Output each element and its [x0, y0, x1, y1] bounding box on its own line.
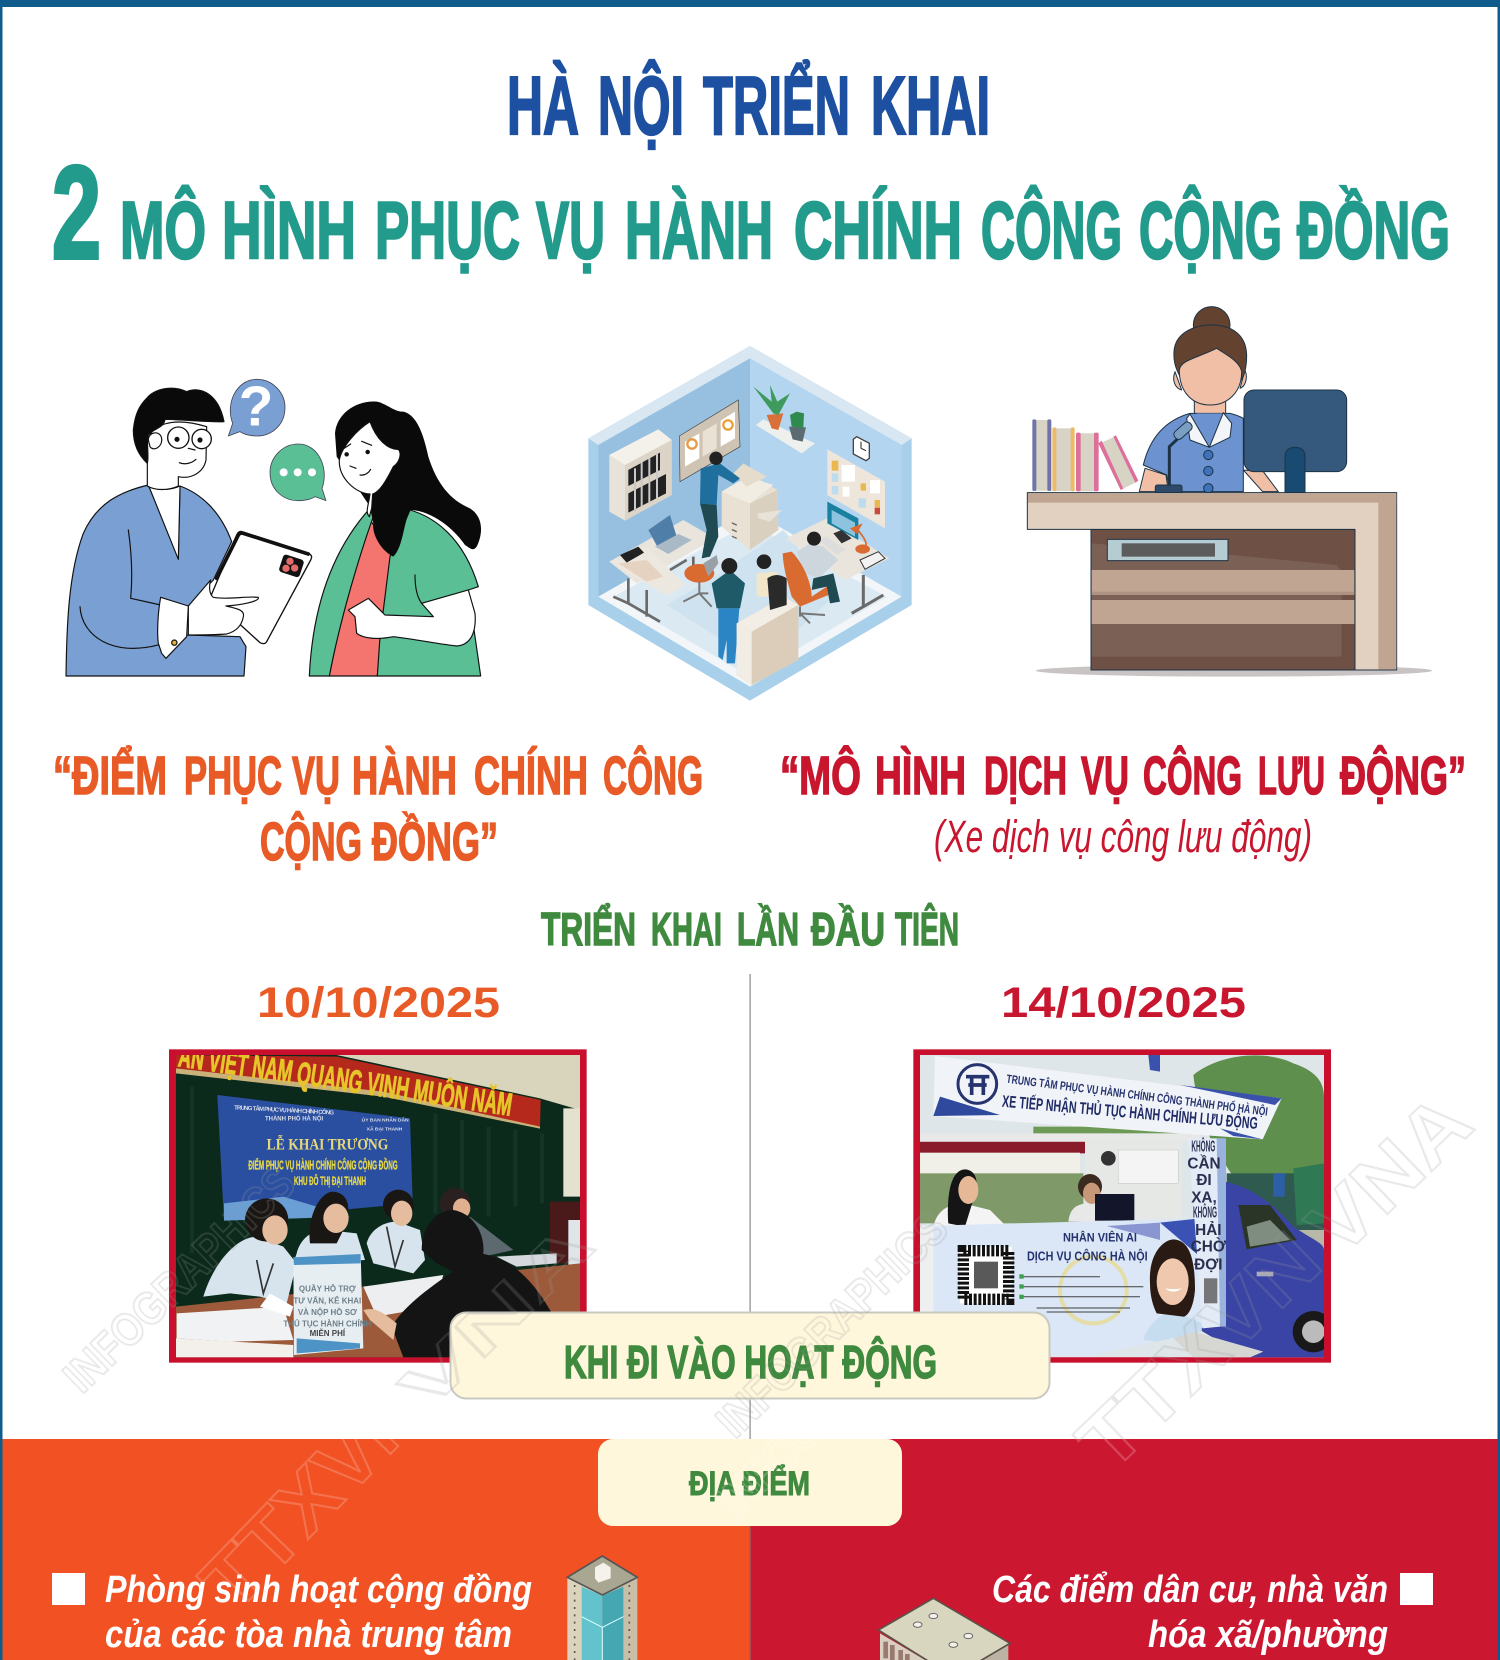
illustration: reception desk	[1027, 307, 1432, 677]
counter banner	[920, 1218, 1202, 1357]
photo: opening ceremony: TRUNG TÂM PHỤC VỤ HÀNH CHÍNH CÔNG	[234, 1103, 335, 1117]
photo: opening ceremony: THỦ TỤC HÀNH CHÍNH	[283, 1320, 371, 1329]
callout: location label	[598, 1439, 902, 1526]
staff	[934, 1206, 1004, 1226]
title	[52, 59, 1450, 286]
hand and cuff	[188, 580, 258, 635]
bullet square	[1400, 1573, 1433, 1605]
panel: left location: của các tòa nhà trung tâm	[105, 1614, 512, 1656]
title: CỘNG	[1139, 185, 1282, 276]
subheading: first rollout: KHAI	[651, 903, 722, 955]
photo: mobile service vehicle: KHÔNG	[1191, 1138, 1215, 1156]
label: mobile public service: CÔNG	[1143, 745, 1242, 806]
clock	[853, 437, 869, 461]
ceiling	[337, 1055, 580, 1110]
checklist lines	[1020, 1276, 1143, 1313]
photo: mobile service vehicle: XA,	[1191, 1190, 1217, 1207]
AI presenter	[1144, 1314, 1202, 1342]
photo: opening ceremony	[169, 1037, 587, 1363]
photo: mobile service vehicle: TRUNG TÂM PHỤC VỤ HÀNH CHÍNH CÔNG THÀNH PHỐ HÀ NỘI	[1006, 1071, 1269, 1119]
label: mobile public service: VỤ	[1081, 746, 1129, 806]
watermark: TTXVN	[183, 1364, 442, 1627]
man's shirt	[66, 485, 246, 676]
label: community admin point: CÔNG	[603, 745, 703, 806]
photo: mobile service vehicle: ĐỢI	[1194, 1256, 1223, 1273]
callout: once in operation: KHI ĐI VÀO HOẠT ĐỘNG	[564, 1336, 937, 1388]
subheading: first rollout: TRIỂN	[541, 903, 636, 955]
title: MÔ	[120, 185, 206, 276]
callout: location label: ĐỊA ĐIỂM	[689, 1465, 810, 1503]
floor	[598, 510, 902, 687]
copier	[722, 475, 778, 550]
watermark: VNA	[387, 1209, 607, 1425]
label: mobile public service	[780, 745, 1466, 862]
receptionist head	[1174, 370, 1246, 390]
photo: opening ceremony: VÀ NỘP HỒ SƠ	[298, 1307, 357, 1317]
photo: mobile service vehicle: CHỜ	[1191, 1238, 1227, 1256]
label: community admin point: “ĐIỂM	[53, 746, 167, 806]
photo: opening ceremony: ẢN VIỆT NAM QUANG VINH MUÔN NĂM	[176, 1037, 515, 1123]
curtain folds	[190, 1087, 544, 1253]
title: TRIỂN	[703, 59, 850, 152]
watermark	[60, 1104, 1476, 1602]
monitor	[1244, 390, 1347, 472]
seated man and orange chair	[797, 543, 838, 578]
standing people	[757, 572, 777, 597]
illustration: two people talking: ?	[239, 375, 273, 438]
red slogan banner	[176, 1055, 541, 1128]
notice board	[827, 449, 885, 528]
title: VỤ	[536, 186, 605, 276]
question bubble	[228, 379, 285, 436]
photo: opening ceremony: LỄ KHAI TRƯƠNG	[267, 1135, 388, 1153]
center divider bottom	[750, 1526, 751, 1660]
label: community admin point: HÀNH	[352, 746, 457, 806]
woman body	[329, 517, 393, 676]
blue truck cab	[1200, 1182, 1324, 1357]
photo: opening ceremony: MIỄN PHÍ	[310, 1329, 346, 1338]
table	[176, 1263, 580, 1357]
photo: opening ceremony: KHU ĐÔ THỊ ĐẠI THANH	[294, 1173, 366, 1188]
location text: Phòng sinh hoạt cộng đồng	[105, 1569, 532, 1611]
title: CHÍNH	[794, 185, 962, 276]
watermark: VNA	[1290, 1076, 1488, 1272]
photo: opening ceremony: TƯ VẤN, KÊ KHAI	[293, 1295, 361, 1305]
icon: building	[878, 1598, 1010, 1660]
blue backdrop	[217, 1095, 413, 1221]
subheading: first rollout	[541, 903, 959, 955]
photo: opening ceremony: ỦY BAN NHÂN DÂN	[362, 1117, 409, 1124]
photo: opening ceremony: ĐIỂM PHỤC VỤ HÀNH CHÍNH CÔNG CỘNG ĐỒNG	[248, 1157, 398, 1172]
coffee counter	[737, 597, 798, 685]
microphone	[1169, 437, 1180, 487]
photo: mobile service vehicle: DỊCH VỤ CÔNG HÀ NỘI	[1027, 1249, 1148, 1264]
trees	[1193, 1055, 1324, 1177]
label: mobile public service: LƯU	[1258, 746, 1325, 806]
illustration: isometric office room	[588, 346, 912, 701]
woman hair and face	[335, 402, 481, 557]
watermark: INFOGRAPHICS	[706, 1201, 958, 1447]
vertical banner	[1188, 1138, 1226, 1328]
man's head	[147, 422, 207, 489]
center divider	[750, 974, 751, 1440]
ground step	[1173, 1332, 1263, 1357]
parking lot	[1227, 1173, 1324, 1237]
label: mobile public service: (Xe dịch vụ công lưu động)	[934, 811, 1312, 862]
bookshelf	[609, 429, 672, 521]
label: mobile public service: DỊCH	[984, 746, 1067, 806]
right desk	[786, 518, 889, 580]
title: 2	[52, 139, 101, 286]
panel: left location	[0, 1439, 750, 1660]
photo: mobile service vehicle	[913, 1049, 1334, 1363]
walls	[598, 358, 750, 597]
icon: tower	[567, 1556, 637, 1660]
podium	[550, 1202, 580, 1263]
label: community admin point: ĐỒNG”	[372, 812, 498, 872]
panel: right location	[750, 1439, 1500, 1660]
photo: mobile service vehicle: HẢI	[1195, 1222, 1222, 1239]
staff	[440, 1188, 470, 1212]
label: community admin point: CHÍNH	[474, 746, 588, 806]
bullet square	[52, 1573, 85, 1605]
label: community admin point: CỘNG	[260, 811, 362, 872]
counter	[1091, 529, 1355, 670]
ellipsis bubble	[270, 444, 326, 501]
photo: opening ceremony: THÀNH PHỐ HÀ NỘI	[265, 1115, 324, 1123]
title: PHỤC	[375, 186, 520, 276]
service room	[920, 1142, 1087, 1153]
watermark: TTXVN	[1060, 1215, 1338, 1487]
watermark: INFOGRAPHICS	[53, 1156, 305, 1402]
title: KHAI	[871, 59, 990, 152]
location text: Các điểm dân cư, nhà văn	[992, 1569, 1388, 1611]
photo: mobile service vehicle: ĐI	[1196, 1172, 1212, 1189]
photo: opening ceremony: QUẦY HỖ TRỢ	[299, 1284, 356, 1294]
title: NỘI	[598, 59, 684, 152]
title: HÌNH	[222, 185, 356, 276]
date right: 14/10/2025	[1001, 979, 1246, 1027]
title: HÀNH	[625, 186, 773, 276]
label: mobile public service: HÌNH	[875, 746, 966, 806]
watermark: INFOGRAPHICS	[706, 1281, 958, 1527]
callout: once in operation	[450, 1312, 1050, 1398]
overhead sign	[933, 1056, 1282, 1139]
receptionist body	[1139, 468, 1278, 492]
subheading: first rollout: LẦN	[737, 903, 799, 955]
photo: mobile service vehicle: NHÂN VIÊN AI	[1063, 1230, 1137, 1245]
label: community admin point: VỤ	[292, 746, 340, 806]
label: mobile public service: “MÔ	[780, 745, 861, 806]
customer in black	[394, 1254, 551, 1358]
title: CÔNG	[981, 185, 1122, 276]
photo: mobile service vehicle: XE TIẾP NHẬN THỦ TỤC HÀNH CHÍNH LƯU ĐỘNG	[1001, 1092, 1259, 1133]
desk shadow	[1036, 665, 1432, 677]
photo: opening ceremony: XÃ ĐẠI THANH	[367, 1126, 403, 1133]
date left: 10/10/2025	[257, 979, 500, 1027]
QR code	[960, 1247, 1012, 1303]
tablet	[211, 531, 312, 644]
subheading: first rollout: TIÊN	[895, 903, 959, 955]
label: community admin point	[53, 745, 703, 872]
orange chair	[684, 564, 714, 583]
photo: mobile service vehicle: CẦN	[1187, 1155, 1221, 1172]
panel: right location: hóa xã/phường	[1148, 1614, 1388, 1656]
photo: mobile service vehicle: KHÔNG	[1193, 1204, 1217, 1222]
man at copier	[700, 463, 740, 505]
subheading: first rollout: ĐẦU	[811, 903, 885, 955]
illustration: two people talking	[66, 375, 481, 676]
label: community admin point: PHỤC	[184, 746, 282, 806]
plants shelf	[756, 419, 815, 453]
watermark: TTXVN	[1060, 1215, 1338, 1487]
left desks	[609, 520, 715, 583]
books	[1032, 419, 1138, 491]
woman arm	[348, 590, 475, 646]
title: HÀ	[507, 59, 579, 152]
table sign	[293, 1254, 363, 1355]
wall poster	[679, 400, 740, 482]
